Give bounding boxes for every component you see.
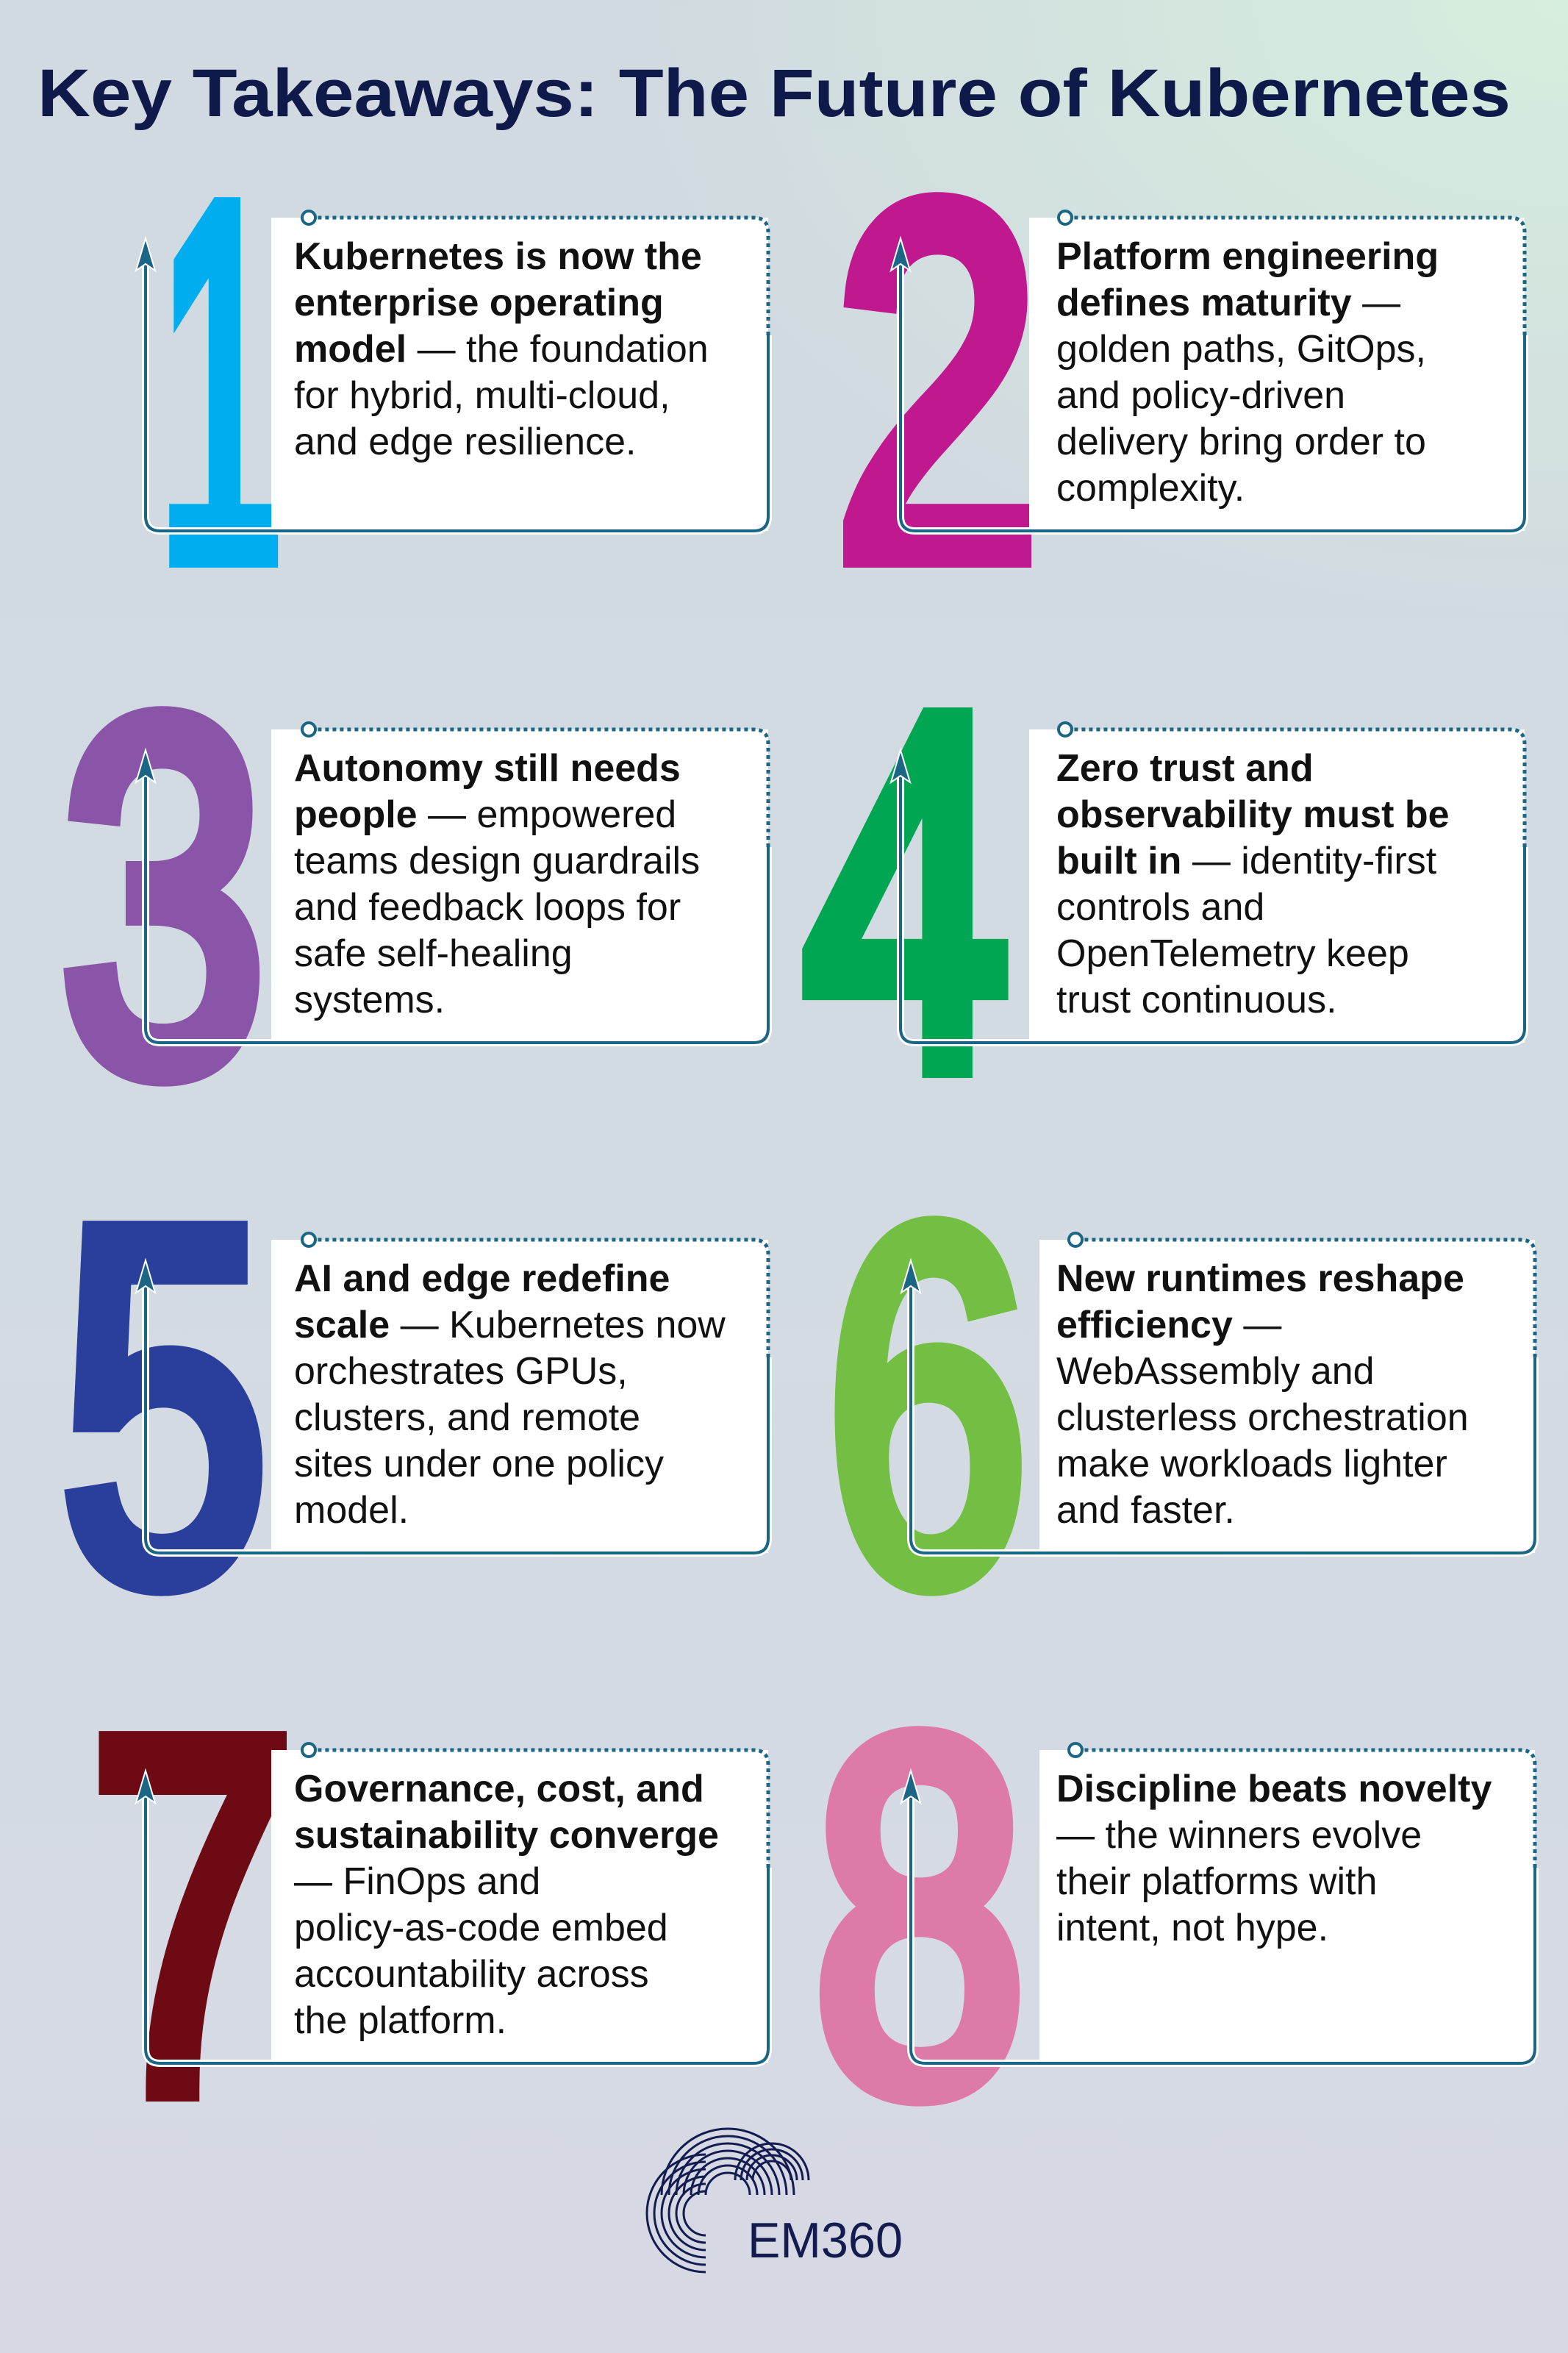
card 2: complexity. xyxy=(1056,467,1245,510)
card 1 xyxy=(136,211,768,531)
card 4: controls and xyxy=(1056,886,1264,929)
card 6: clusterless orchestration xyxy=(1056,1396,1469,1439)
card 3: Autonomy still needs xyxy=(294,747,681,790)
logo xyxy=(647,2129,903,2272)
card 7: — FinOps and xyxy=(294,1860,540,1903)
digits xyxy=(60,102,1040,2195)
card 7: policy-as-code embed xyxy=(294,1907,668,1949)
card 6 xyxy=(901,1233,1535,1553)
card 4: Zero trust and xyxy=(1056,747,1314,790)
card 1: enterprise operating xyxy=(294,282,664,324)
digits: 5 xyxy=(61,1126,268,1685)
card 2 xyxy=(891,211,1525,531)
card 5: orchestrates GPUs, xyxy=(294,1350,628,1393)
card 7: sustainability converge xyxy=(294,1814,719,1857)
card 6: make workloads lighter xyxy=(1056,1443,1447,1485)
card 2: and policy-driven xyxy=(1056,374,1345,417)
card 3 xyxy=(136,723,768,1043)
digits: 6 xyxy=(826,1126,1028,1685)
card 5: AI and edge redefine xyxy=(294,1257,670,1300)
card 4: trust continuous. xyxy=(1056,979,1337,1021)
logo text: EM360 xyxy=(748,2213,903,2268)
card 6: and faster. xyxy=(1056,1489,1235,1532)
card 7: Governance, cost, and xyxy=(294,1768,704,1810)
card 6: efficiency — xyxy=(1056,1304,1281,1346)
card 4: observability must be xyxy=(1056,793,1450,836)
card 8: — the winners evolve xyxy=(1056,1814,1422,1857)
card 1: and edge resilience. xyxy=(294,421,636,463)
card 3: safe self-healing xyxy=(294,932,573,975)
card 2: Platform engineering xyxy=(1056,235,1439,278)
card 2: delivery bring order to xyxy=(1056,421,1426,463)
digits: 3 xyxy=(60,616,266,1175)
card 3: teams design guardrails xyxy=(294,840,700,882)
digits: 8 xyxy=(813,1636,1026,2195)
card 5: model. xyxy=(294,1489,409,1532)
card 1: model — the foundation xyxy=(294,328,709,371)
card 8: intent, not hype. xyxy=(1056,1907,1328,1949)
card 4: OpenTelemetry keep xyxy=(1056,932,1409,975)
card 5: scale — Kubernetes now xyxy=(294,1304,726,1346)
card 3: people — empowered xyxy=(294,793,676,836)
digits: 7 xyxy=(90,1636,296,2195)
card 1: for hybrid, multi-cloud, xyxy=(294,374,670,417)
card 8: their platforms with xyxy=(1056,1860,1377,1903)
digits: 2 xyxy=(834,102,1040,661)
card 5: sites under one policy xyxy=(294,1443,664,1485)
card 6: WebAssembly and xyxy=(1056,1350,1375,1393)
card 3: systems. xyxy=(294,979,445,1021)
card 7: accountability across xyxy=(294,1953,649,1996)
title: Key Takeaways: The Future of Kubernetes xyxy=(37,56,1511,131)
card 1: Kubernetes is now the xyxy=(294,235,702,278)
card 2: defines maturity — xyxy=(1056,282,1400,324)
digits: 1 xyxy=(158,102,283,661)
card 5: clusters, and remote xyxy=(294,1396,640,1439)
card 8 xyxy=(901,1743,1535,2063)
card 5 xyxy=(136,1233,768,1553)
digits: 4 xyxy=(803,613,1009,1171)
card 4 xyxy=(891,723,1525,1043)
card 2: golden paths, GitOps, xyxy=(1056,328,1426,371)
card 6: New runtimes reshape xyxy=(1056,1257,1464,1300)
card 7 xyxy=(136,1743,768,2063)
card 3: and feedback loops for xyxy=(294,886,681,929)
card 8: Discipline beats novelty xyxy=(1056,1768,1492,1810)
icon: em360 swirl xyxy=(647,2129,809,2272)
card 7: the platform. xyxy=(294,1999,506,2042)
card 4: built in — identity-first xyxy=(1056,840,1437,882)
